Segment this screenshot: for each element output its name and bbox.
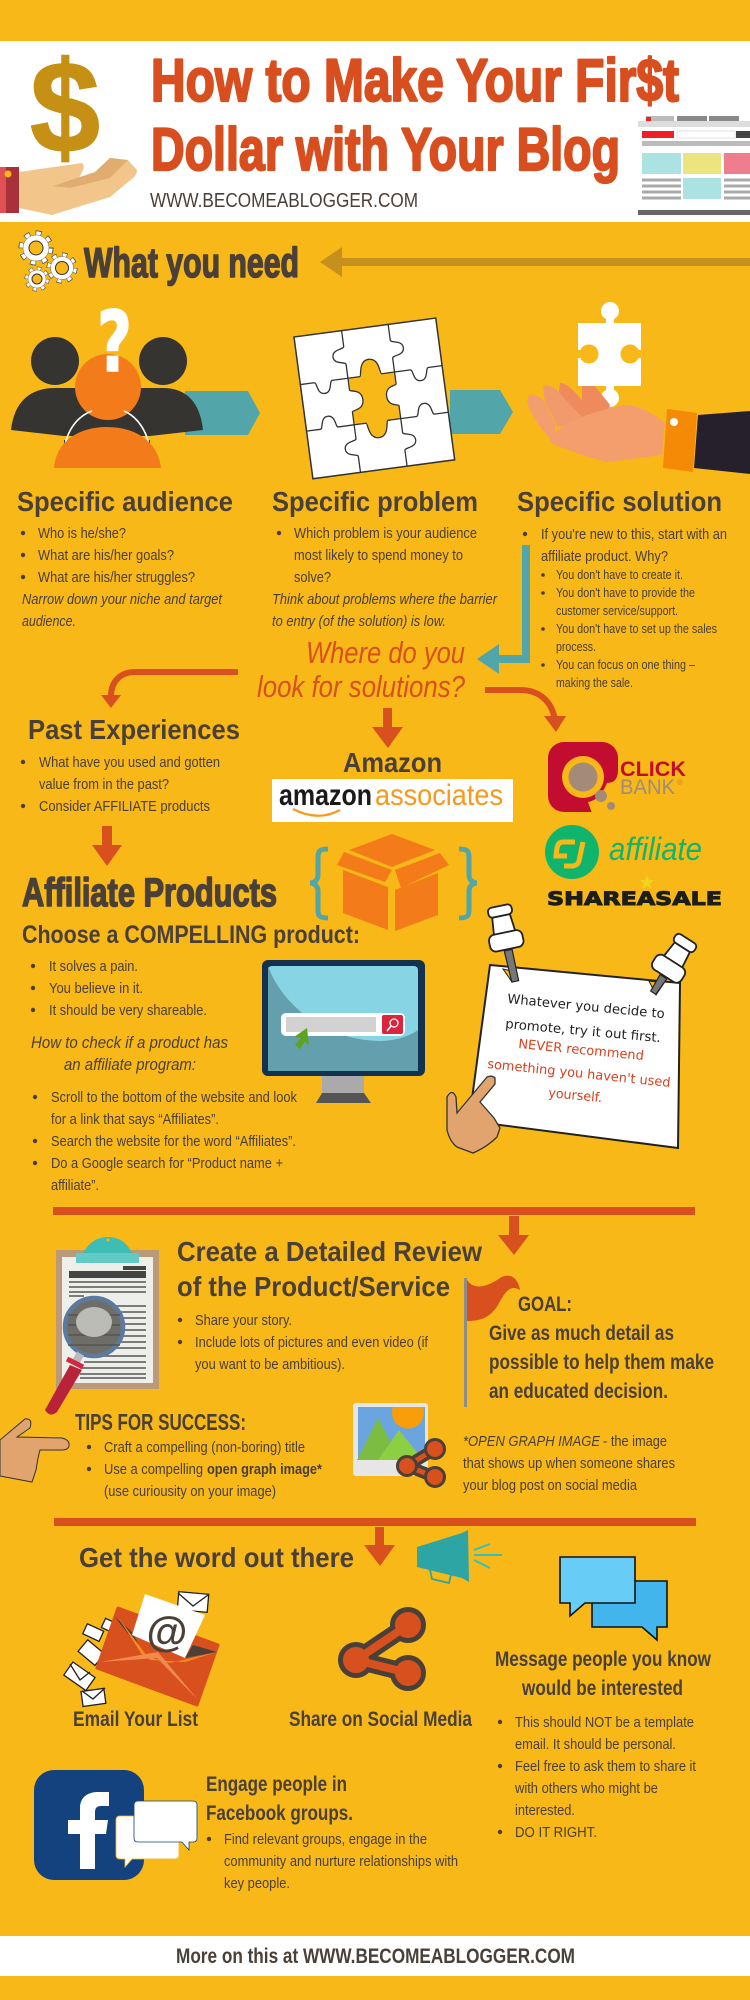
panel: past experiences — [21, 714, 240, 815]
bullet list: You can focus on one thing – — [556, 657, 696, 672]
logo: clickbank: ® — [677, 778, 683, 787]
subheading: how to check: How to check if a product has — [31, 1033, 228, 1052]
icon: flag — [464, 1276, 520, 1407]
logo: clickbank: CLICK — [620, 758, 686, 781]
icon: push pin left — [482, 903, 531, 985]
subheading: how to check — [31, 1033, 228, 1074]
logo: clickbank — [548, 742, 686, 813]
icon: clipboard with magnifier — [45, 1237, 159, 1415]
bullet list — [207, 1831, 458, 1892]
icon: envelope with at sign: @ — [147, 1608, 187, 1655]
bullet list: Consider AFFILIATE products — [39, 798, 210, 815]
heading: Specific solution — [517, 486, 722, 517]
bullet list: Find relevant groups, engage in the — [224, 1831, 427, 1848]
icon: gold dollar on hand — [0, 34, 137, 215]
heading: Choose a COMPELLING product: — [22, 921, 360, 949]
bullet list: Do a Google search for “Product name + — [51, 1155, 283, 1172]
bullet list: customer service/support. — [556, 603, 678, 618]
logo: cj affiliate — [545, 825, 702, 879]
icon: gears — [22, 234, 74, 289]
panel: share on social media — [289, 1610, 472, 1731]
logo: shareasale: SHAREASALE — [547, 888, 722, 910]
bullet list: Use a compelling — [104, 1461, 203, 1478]
bullet list: Search the website for the word “Affiliates”. — [51, 1133, 296, 1150]
icon: megaphone — [417, 1530, 502, 1583]
arrow: to affiliate networks — [485, 690, 566, 732]
panel: detailed review — [45, 1236, 482, 1415]
bullet list — [31, 958, 207, 1019]
panel: specific solution — [517, 302, 750, 690]
bullet list: Scroll to the bottom of the website and look — [51, 1089, 297, 1106]
divider with arrow — [53, 1207, 695, 1255]
open graph definition: your blog post on social media — [463, 1477, 638, 1494]
logo: amazon associates: associates — [375, 779, 503, 812]
bullet list: affiliate”. — [51, 1177, 99, 1194]
bullet list: Feel free to ask them to share it — [515, 1758, 697, 1775]
website url: WWW.BECOMEABLOGGER.COM — [150, 190, 418, 212]
bullet list: It solves a pain. — [49, 958, 138, 975]
icon: chat bubbles — [560, 1557, 667, 1640]
icon: pointing hand — [447, 1076, 500, 1153]
arrow: to amazon — [372, 708, 403, 748]
panel: sticky note — [447, 903, 702, 1153]
bullet list: open graph image* — [207, 1461, 322, 1478]
heading — [177, 1236, 482, 1302]
goal text — [489, 1322, 714, 1403]
bullet list: It should be very shareable. — [49, 1002, 207, 1019]
goal label: GOAL: — [518, 1293, 572, 1316]
bullet list: to entry (of the solution) is low. — [272, 613, 446, 630]
panel: amazon — [272, 747, 513, 822]
panel: tips for success — [0, 1409, 322, 1500]
icon: envelope with at sign — [64, 1592, 218, 1706]
icon: audience group — [11, 293, 260, 468]
open graph definition — [463, 1433, 675, 1494]
heading: where do you look for solutions: look for solutions? — [257, 669, 466, 704]
arrow: teal to where do you look — [477, 545, 530, 674]
heading: Engage people in — [206, 1773, 347, 1796]
heading: Create a Detailed Review — [177, 1236, 482, 1267]
open graph definition: - the image — [603, 1433, 667, 1450]
heading: get the word out there: Get the word out there — [79, 1542, 354, 1573]
title: Dollar with Your Blog — [151, 116, 620, 183]
bullet list — [87, 1439, 322, 1500]
subheading: how to check: an affiliate program: — [64, 1055, 196, 1074]
bullet list: Who is he/she? — [38, 525, 126, 542]
panel: facebook groups — [34, 1770, 458, 1892]
bullet list: community and nurture relationships with — [224, 1853, 458, 1870]
icon: monitor with search bar — [262, 960, 425, 1103]
icon: push pin right — [639, 930, 702, 1002]
title — [151, 47, 679, 183]
logo: shareasale — [547, 875, 722, 910]
label: Email Your List — [73, 1708, 198, 1731]
bullet list — [523, 526, 727, 690]
icon: hand with puzzle piece — [527, 302, 750, 474]
panel: goal — [464, 1276, 714, 1407]
logo: clickbank: BANK — [620, 776, 675, 799]
note text — [487, 992, 671, 1106]
bullet list: Include lots of pictures and even video (if — [195, 1334, 429, 1351]
note text: NEVER recommend — [518, 1037, 644, 1064]
icon: pointing hand — [0, 1419, 69, 1482]
divider with arrow — [54, 1518, 696, 1566]
bullet list: affiliate product. Why? — [541, 548, 668, 565]
open graph definition: that shows up when someone shares — [463, 1455, 675, 1472]
heading: what you need: What you need — [84, 239, 299, 286]
bullet list — [272, 525, 498, 630]
bullet list: (use curiousity on your image) — [104, 1483, 276, 1500]
arrow: long left — [320, 247, 750, 277]
arrow: to affiliate products — [92, 826, 122, 866]
bullet list: solve? — [294, 569, 331, 586]
bullet list: key people. — [224, 1875, 290, 1892]
heading — [206, 1773, 353, 1825]
note text: promote, try it out first. — [505, 1017, 661, 1046]
heading: where do you look for solutions — [257, 635, 466, 704]
logo: amazon associates: amazon — [279, 779, 372, 812]
icon: browser window — [638, 116, 750, 215]
bullet list: What are his/her goals? — [38, 547, 174, 564]
heading: Specific audience — [17, 486, 233, 517]
panel: header banner — [0, 34, 750, 222]
logo: amazon associates — [272, 779, 513, 822]
note text: yourself. — [548, 1086, 603, 1106]
goal text: Give as much detail as — [489, 1322, 674, 1345]
bullet list: Share your story. — [195, 1312, 292, 1329]
label: Share on Social Media — [289, 1708, 472, 1731]
heading: would be interested — [521, 1677, 683, 1700]
logo: cj affiliate: affiliate — [609, 831, 702, 867]
icon: share — [340, 1610, 424, 1688]
bullet list: Which problem is your audience — [294, 525, 477, 542]
panel: choose a compelling product — [22, 921, 360, 1194]
bullet list: DO IT RIGHT. — [515, 1824, 597, 1841]
icon: box in braces — [310, 834, 477, 931]
bullet list: with others who might be — [514, 1780, 658, 1797]
panel: specific audience — [11, 293, 260, 630]
bullet list: Narrow down your niche and target — [22, 591, 223, 608]
bullet list: audience. — [22, 613, 76, 630]
note text: something you haven't used — [487, 1057, 671, 1091]
icon: facebook with chat — [34, 1770, 197, 1880]
heading — [495, 1648, 712, 1700]
panel: email your list — [64, 1592, 218, 1731]
bullet list: What have you used and gotten — [39, 754, 220, 771]
icon: jigsaw puzzle — [294, 318, 513, 479]
bullet list: for a link that says “Affiliates”. — [51, 1111, 219, 1128]
bullet list: This should NOT be a template — [515, 1714, 694, 1731]
panel: specific problem — [272, 318, 513, 630]
bullet list: interested. — [515, 1802, 575, 1819]
bullet list — [498, 1714, 697, 1841]
open graph definition: *OPEN GRAPH IMAGE — [463, 1433, 601, 1450]
bullet list: email. It should be personal. — [515, 1736, 676, 1753]
heading: Amazon — [343, 747, 442, 778]
bullet list: Craft a compelling (non-boring) title — [104, 1439, 305, 1456]
heading: Facebook groups. — [206, 1802, 353, 1825]
heading: Specific problem — [272, 486, 478, 517]
heading: TIPS FOR SUCCESS: — [75, 1409, 246, 1435]
bullet list: You don't have to provide the — [556, 585, 695, 600]
bullet list — [21, 525, 223, 630]
bullet list: What are his/her struggles? — [38, 569, 195, 586]
icon: open graph image — [353, 1403, 444, 1486]
bullet list — [21, 754, 220, 815]
goal text: an educated decision. — [489, 1380, 668, 1403]
footer banner — [0, 1936, 750, 1976]
bullet list — [33, 1089, 297, 1194]
heading: where do you look for solutions: Where do you — [306, 635, 465, 670]
bullet list: Think about problems where the barrier — [272, 591, 498, 608]
bullet list: You don't have to set up the sales — [556, 621, 717, 636]
bullet list: making the sale. — [556, 675, 633, 690]
bullet list — [178, 1312, 429, 1373]
footer banner: More on this at WWW.BECOMEABLOGGER.COM — [176, 1945, 575, 1968]
bullet list: You believe in it. — [49, 980, 143, 997]
heading: Past Experiences — [28, 714, 240, 745]
panel: message people — [495, 1557, 712, 1841]
bullet list: you want to be ambitious). — [195, 1356, 345, 1373]
bullet list: You don't have to create it. — [556, 567, 683, 582]
bullet list: value from in the past? — [39, 776, 169, 793]
icon: audience group: ? — [97, 293, 132, 391]
heading: affiliate products: Affiliate Products — [22, 871, 277, 915]
bullet list: process. — [556, 639, 596, 654]
note text: Whatever you decide to — [507, 992, 665, 1022]
icon: gold dollar on hand: $ — [30, 34, 100, 180]
bullet list: most likely to spend money to — [294, 547, 463, 564]
heading: of the Product/Service — [177, 1271, 450, 1302]
arrow: to past experiences — [101, 672, 238, 708]
